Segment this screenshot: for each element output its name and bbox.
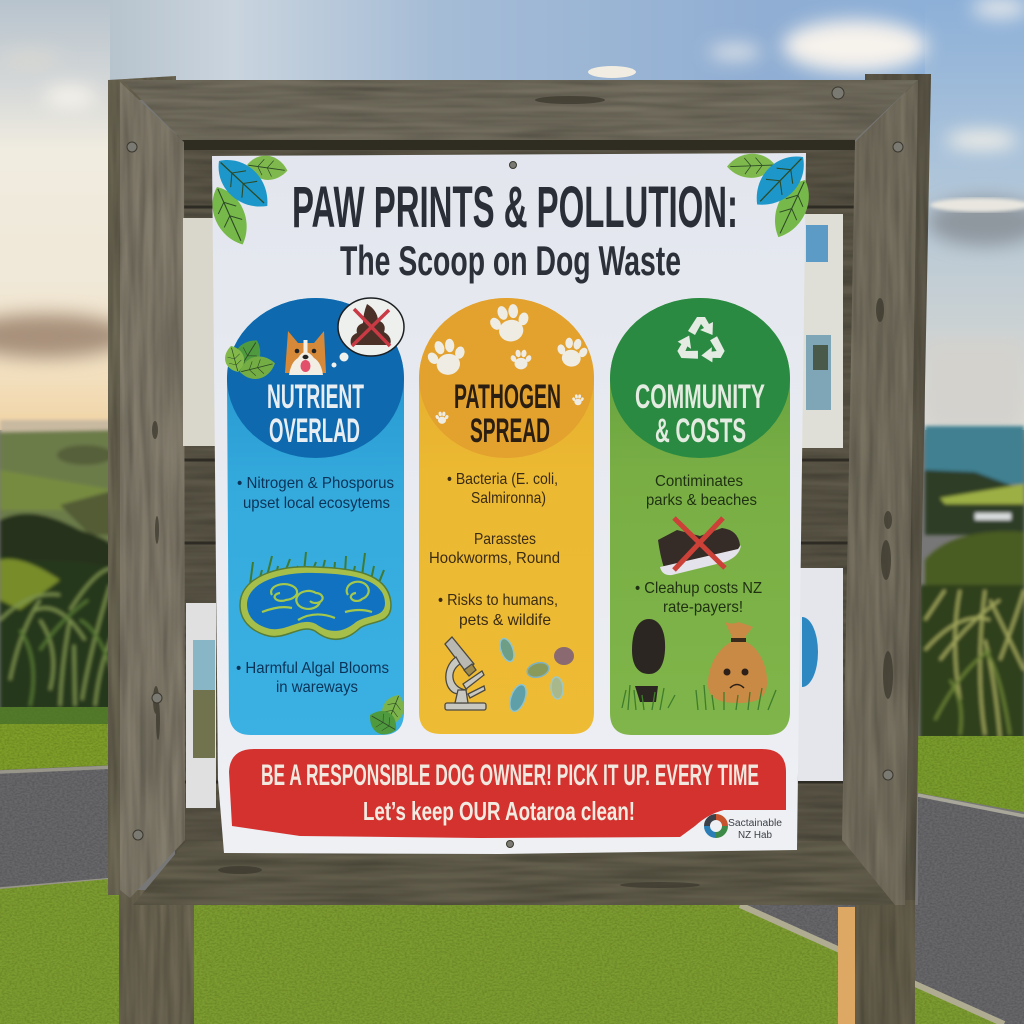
notice lower left — [186, 603, 216, 808]
body text: contamination — [646, 473, 757, 509]
body text: nutrients — [237, 475, 394, 512]
panel background — [419, 298, 594, 734]
body text: algal blooms — [236, 660, 389, 696]
heading: PATHOGEN — [454, 378, 561, 416]
landscape left — [0, 420, 116, 889]
icon: grass tufts — [622, 685, 776, 710]
banner background — [229, 749, 786, 838]
icon: recycling — [673, 317, 729, 366]
icon: footprint — [632, 619, 665, 702]
fixing screws — [127, 87, 903, 848]
header circle — [610, 298, 790, 458]
icon: crossed-out shoe — [658, 518, 741, 575]
body text: nutrients: • Nitrogen & Phosporus — [237, 475, 394, 492]
back boards — [175, 135, 855, 855]
icon: microscope — [445, 637, 486, 710]
knots and cracks — [152, 96, 893, 888]
poster — [204, 145, 818, 854]
body text: pathogens: Salmironna) — [471, 490, 546, 507]
body text: contamination: Contiminates — [655, 473, 743, 490]
heading: NUTRIENT — [267, 378, 364, 416]
heading: OVERLAD — [269, 412, 360, 450]
left lawn — [0, 707, 116, 771]
lawn foreground — [0, 878, 1004, 1024]
panel background — [227, 298, 404, 735]
sky background — [0, 0, 1024, 430]
icon: paw prints — [423, 301, 591, 424]
wooden sign frame — [108, 74, 931, 1024]
heading — [454, 378, 561, 450]
leaves top left — [204, 149, 289, 251]
body text: cleanup costs: • Cleahup costs NZ — [635, 580, 762, 597]
body text: pathogens: • Bacteria (E. coli, — [447, 471, 558, 488]
body text: algal blooms: in wareways — [276, 679, 358, 696]
body text: pathogens: Parasstes — [474, 531, 536, 548]
body text: algal blooms: • Harmful Algal Blooms — [236, 660, 389, 677]
icon: sad waste bag — [708, 622, 767, 703]
landscape right — [740, 426, 1024, 1024]
heading — [267, 378, 364, 450]
left path — [0, 765, 116, 888]
heading — [635, 378, 765, 450]
icon: no dog poo — [338, 298, 404, 356]
body text: contamination: parks & beaches — [646, 492, 757, 509]
heading: COMMUNITY — [635, 378, 765, 416]
logo: Sustainable NZ Hub: Sactainable — [728, 818, 782, 829]
icon: corgi — [285, 331, 326, 375]
right post leg — [855, 900, 915, 1024]
heading: SPREAD — [470, 412, 550, 450]
new timber strip — [838, 907, 855, 1024]
right upright — [842, 80, 918, 905]
subtitle: The Scoop on Dog Waste — [340, 237, 681, 284]
logo: Sustainable NZ Hub: NZ Hab — [738, 830, 772, 841]
banner tagline: Let’s keep OUR Aotaroa clean! — [363, 796, 635, 826]
logo: Sustainable NZ Hub — [707, 817, 782, 841]
body text: cleanup costs — [635, 580, 762, 616]
right lawn — [918, 736, 1024, 812]
header circle — [227, 298, 404, 458]
body text: nutrients: upset local ecosytems — [243, 495, 390, 512]
right path — [740, 793, 1024, 1024]
call-to-action banner — [229, 749, 786, 838]
header circle — [419, 298, 594, 458]
body text: pathogens — [429, 471, 560, 629]
icon: microbes — [497, 637, 574, 714]
panel: nutrient overload — [222, 298, 409, 740]
thought bubbles — [332, 352, 348, 368]
top beam — [122, 80, 918, 140]
notice upper right — [800, 214, 843, 448]
icon: corner leaves — [364, 691, 409, 740]
notice lower right — [798, 568, 843, 781]
bottom beam — [133, 841, 895, 905]
back-right post edge — [865, 74, 931, 905]
poster sheet — [212, 153, 806, 854]
panel: community and costs — [610, 298, 790, 735]
back-left post edge — [108, 76, 176, 895]
body text: pathogens: • Risks to humans, — [438, 592, 558, 609]
panel: pathogen spread — [419, 298, 594, 734]
body text: cleanup costs: rate-payers! — [663, 599, 743, 616]
background notices on board — [183, 214, 843, 808]
icon: leaves — [222, 334, 278, 383]
left post leg — [119, 890, 194, 1024]
notice upper left — [183, 218, 217, 446]
heading: & COSTS — [655, 412, 746, 450]
body text: pathogens: pets & wildife — [459, 612, 551, 629]
panel background — [610, 298, 790, 735]
icon: algal pond — [240, 552, 391, 639]
left upright — [120, 82, 185, 898]
leaves top right — [727, 145, 818, 243]
body text: pathogens: Hookworms, Round — [429, 550, 560, 567]
